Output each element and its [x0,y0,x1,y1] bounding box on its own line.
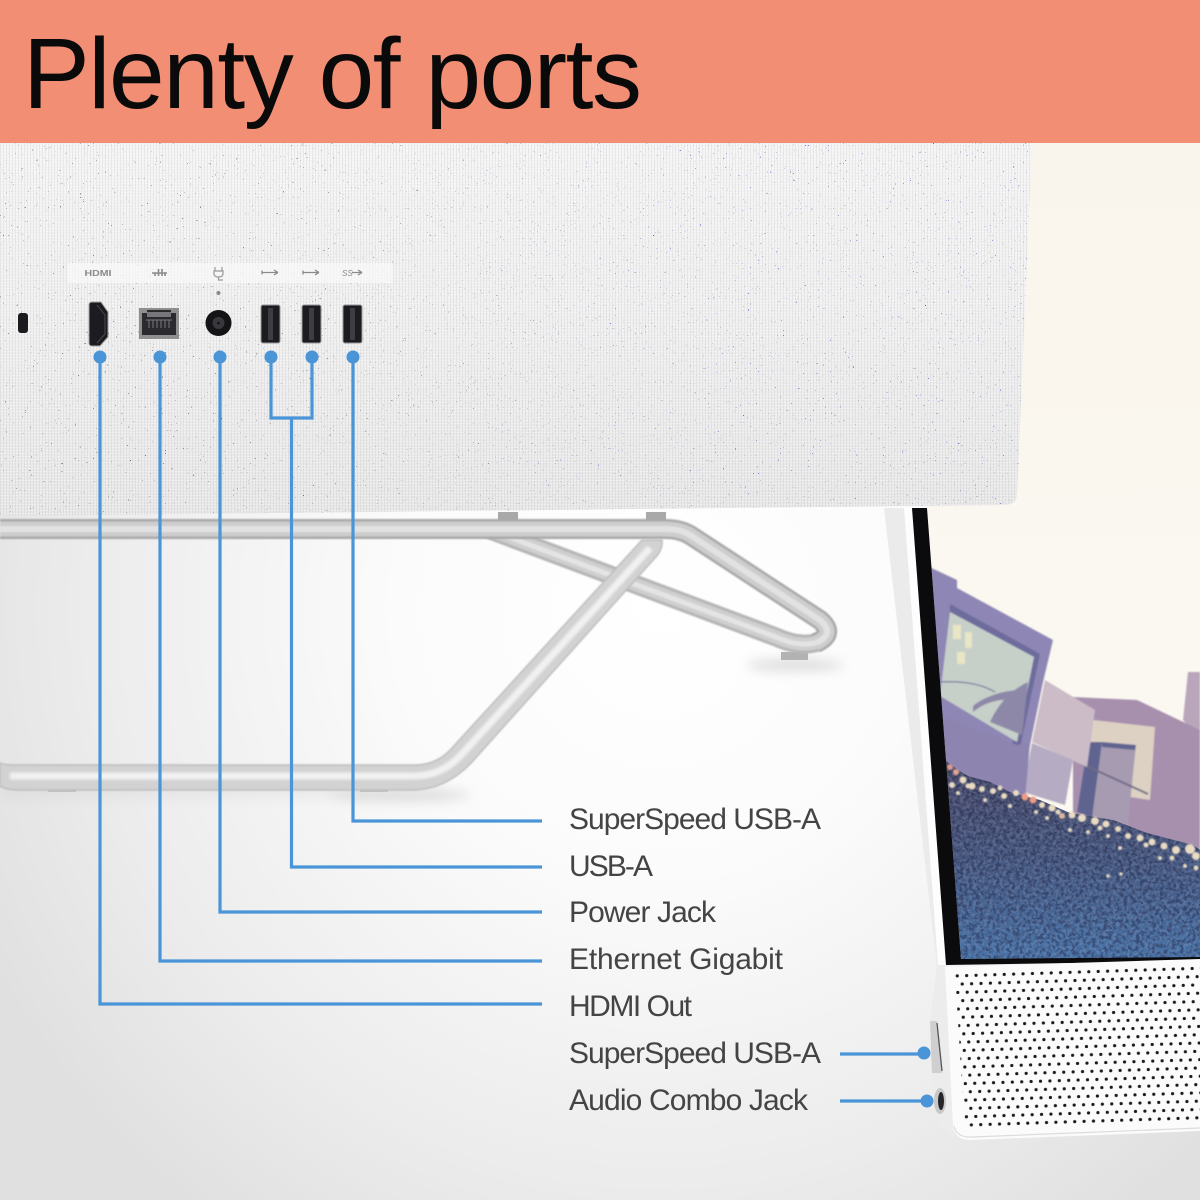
side of base [930,966,955,1137]
callout dots [94,350,934,1108]
port icon label strip [67,263,393,283]
leader: SuperSpeed USB-A [353,357,542,821]
speckled side edge [884,508,946,967]
title: Plenty of ports [23,18,642,130]
small lock slot [18,313,28,333]
rear feet [48,512,808,792]
front tube [0,540,662,790]
dark speckles [0,143,1040,516]
side USB-A port [930,1021,942,1073]
port: USB-A [261,305,280,343]
SuperSpeed USB glyph: SS [342,269,353,278]
USB glyph [262,270,278,275]
USB glyph [303,270,319,275]
power indicator dot [216,291,220,295]
monitor back panel [0,143,1040,516]
hedge [945,760,1200,960]
label: SuperSpeed USB-A [569,1037,821,1070]
ethernet glyph [152,269,167,276]
stand shadows [0,661,843,799]
weave texture [0,143,1032,516]
label: Power Jack [569,896,717,929]
port: power jack [206,310,232,336]
label: Audio Combo Jack [569,1084,809,1117]
speaker base [945,959,1200,1140]
SuperSpeed USB glyph [342,269,362,278]
label: Ethernet Gigabit [569,943,784,976]
label: USB-A [569,850,653,883]
side audio jack [934,1088,946,1114]
port: SuperSpeed USB-A [343,305,362,343]
main tube [0,529,827,643]
leader: side SuperSpeed USB-A [840,1052,923,1056]
photo buildings [925,565,1200,860]
leader: Ethernet Gigabit [160,357,542,961]
port: Ethernet [139,308,179,339]
leader: HDMI Out [100,357,542,1004]
blue speckles [0,143,1040,516]
white edge strip [904,508,946,965]
port labels [569,803,821,1117]
hedge blossoms [947,764,1200,878]
screen image [915,143,1200,963]
speaker grille [956,966,1200,1127]
leader: USB-A [271,357,542,867]
stand [0,512,843,799]
power glyph [214,267,223,280]
HDMI label: HDMI [84,268,112,278]
hedge texture [940,755,1200,960]
product: display seen from the side [884,143,1200,1140]
callout lines [100,357,927,1101]
label: SuperSpeed USB-A [569,803,821,836]
port: USB-A [302,305,321,343]
label: HDMI Out [569,990,693,1023]
black bezel [912,508,1200,965]
rear lower tube [490,530,818,644]
port: HDMI [89,302,108,346]
leader: Power Jack [220,357,542,912]
header band [0,0,1200,143]
leader: Audio Combo Jack [840,1099,927,1103]
